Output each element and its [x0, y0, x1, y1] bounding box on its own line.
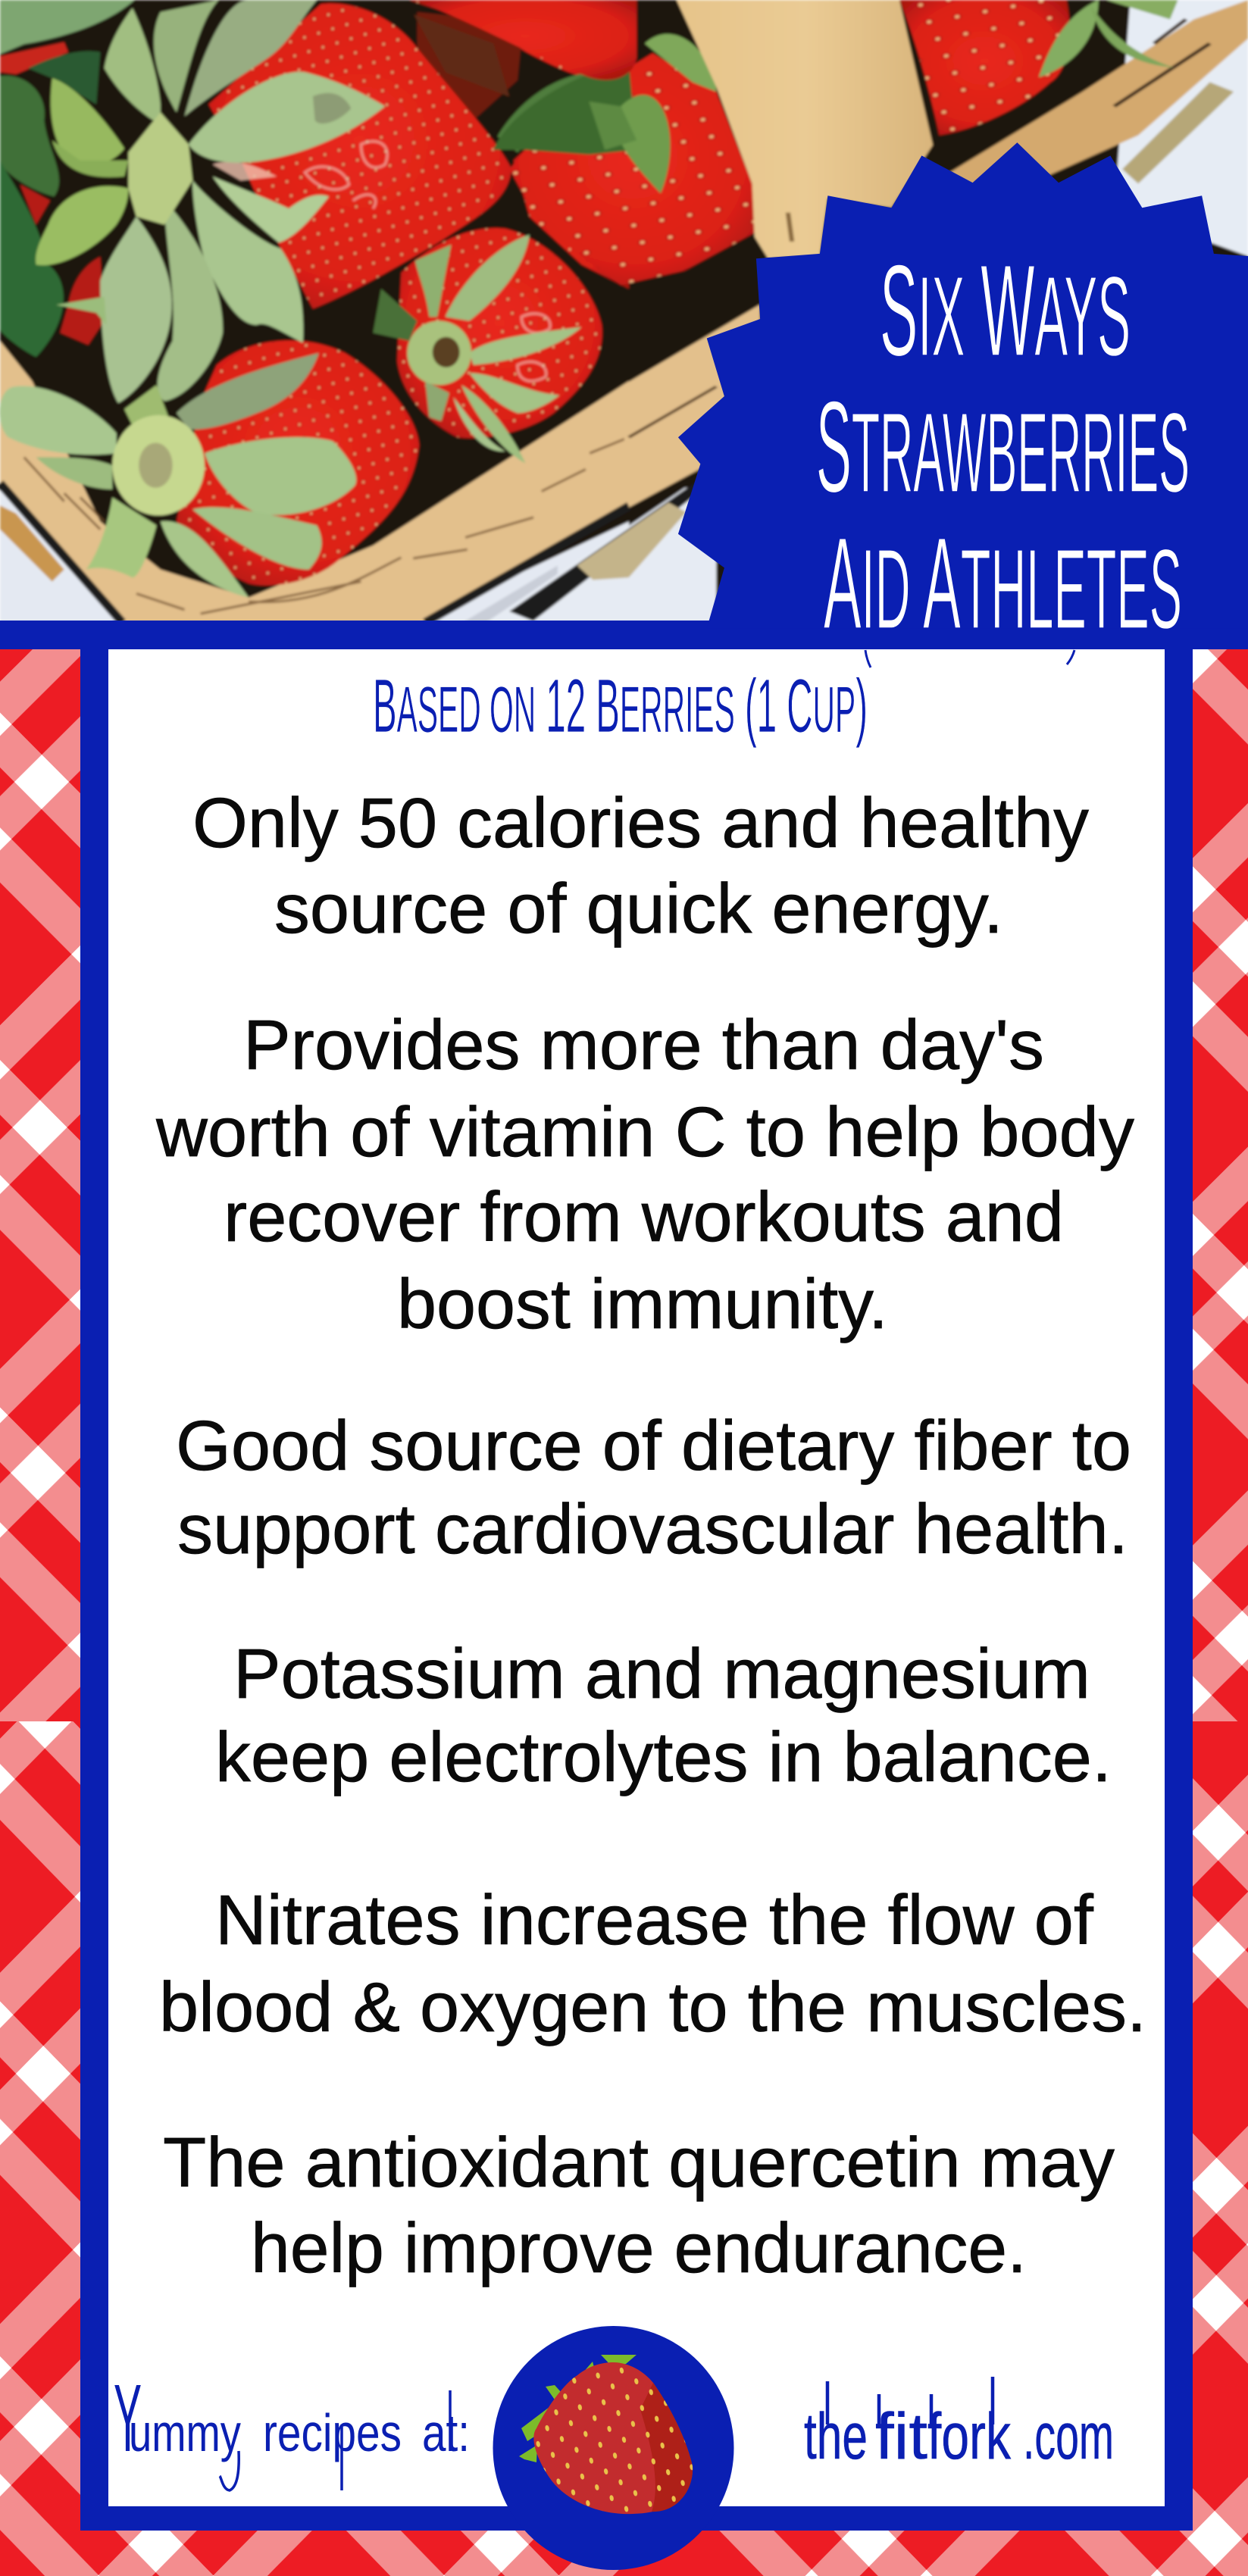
- footer label: Yummy recipes at: ummy: [129, 2403, 241, 2462]
- starburst title badge: [678, 142, 1248, 656]
- left blue frame: [80, 649, 108, 2531]
- footer label: website: the: [804, 2400, 868, 2473]
- basket handle: [677, 0, 933, 258]
- dark green leaves left: [0, 76, 59, 196]
- bottom blue bar: [80, 2506, 1193, 2531]
- clipped parenthesis remnants: [865, 650, 1074, 667]
- icon: strawberry body: [533, 2362, 693, 2514]
- photo left part: [0, 0, 629, 626]
- table surface left: [0, 481, 629, 626]
- gingham background: lower right and bottom: [667, 1721, 1248, 2576]
- top berry: [414, 0, 637, 80]
- lower berry: [177, 340, 419, 586]
- gingham background: left strip upper: [0, 649, 80, 1721]
- big berry: [208, 3, 511, 309]
- top left leaf: [0, 0, 134, 54]
- benefit 6: The antioxidant quercetin may: [163, 2123, 1115, 2202]
- title line: Six Ways: SIX WAYS: [880, 238, 1131, 383]
- benefit 1: source of quick energy.: [274, 869, 1003, 948]
- benefit 5: [159, 1880, 1146, 2046]
- benefit 6: help improve endurance.: [251, 2209, 1027, 2287]
- photo: strawberries in a wooden basket: [0, 0, 1248, 628]
- footer label: Yummy recipes at: recipes: [263, 2403, 402, 2462]
- berry top: [408, 0, 580, 77]
- footer label: Yummy recipes at: at:: [422, 2403, 470, 2462]
- benefit 3: [176, 1406, 1131, 1568]
- top blue bar: [0, 621, 1248, 649]
- peg lower: [577, 502, 686, 580]
- white content panel: [108, 649, 1165, 2506]
- stem leaves: [493, 63, 637, 155]
- footer label: Yummy recipes at: Y: [114, 2365, 142, 2471]
- seed texture: [414, 0, 564, 71]
- gingham background: right strip upper: [1193, 649, 1248, 1721]
- footer label: website: fork: [927, 2400, 1012, 2473]
- middle berry: [509, 53, 756, 285]
- bottom crown leaves: [0, 353, 356, 598]
- wooden rim lower: [621, 305, 760, 508]
- peg upper: [1122, 82, 1234, 183]
- benefit 2: worth of vitamin C to help body: [155, 1093, 1134, 1171]
- footer label: website: fit: [875, 2400, 927, 2473]
- top right green leaves: [497, 72, 629, 152]
- benefit 4: keep electrolytes in balance.: [215, 1718, 1112, 1796]
- icon: strawberry seeds: [533, 2362, 693, 2514]
- icon: strawberry leaves: [519, 2355, 637, 2462]
- red behind crown: [20, 185, 105, 345]
- gingham background: lower left and bottom: [0, 1721, 667, 2576]
- wood grain: [24, 437, 629, 614]
- berry right: [511, 148, 632, 291]
- benefit 2: [155, 1005, 1134, 1343]
- upper wood rim: [939, 0, 1248, 203]
- dark red berry behind: [418, 12, 521, 120]
- table surface right: [1115, 0, 1248, 256]
- right blue frame: [1165, 649, 1193, 2531]
- peg left: [0, 505, 64, 582]
- top right berry: [899, 0, 1070, 136]
- benefit 4: [215, 1634, 1112, 1796]
- top crown leaves: [36, 0, 385, 403]
- benefit 6: [163, 2123, 1115, 2287]
- benefit 3: support cardiovascular health.: [177, 1490, 1128, 1568]
- benefit 2: Provides more than day's: [243, 1005, 1044, 1084]
- middle crown leaves: [373, 235, 582, 463]
- benefit 5: blood & oxygen to the muscles.: [159, 1968, 1146, 2046]
- subheading: BASED ON 12 BERRIES (1 CUP): [373, 664, 868, 749]
- benefit 2: recover from workouts and: [224, 1177, 1064, 1256]
- basket rim left and bottom: [0, 341, 629, 626]
- footer label: Yummy recipes at: [114, 2365, 470, 2490]
- middle berry: [397, 228, 602, 438]
- benefit 5: Nitrates increase the flow of: [215, 1880, 1093, 1959]
- top right leaves: [1039, 0, 1099, 77]
- footer label: website: [804, 2377, 1114, 2473]
- peg right: [571, 526, 629, 580]
- clip bottom: [465, 566, 558, 621]
- benefit 1: Only 50 calories and healthy: [192, 783, 1089, 862]
- benefit 4: Potassium and magnesium: [233, 1634, 1090, 1713]
- footer label: website: .com: [1023, 2400, 1114, 2473]
- benefit 2: boost immunity.: [397, 1265, 888, 1343]
- benefit 1: [192, 783, 1089, 948]
- berry highlights: [305, 142, 550, 381]
- benefit 3: Good source of dietary fiber to: [176, 1406, 1131, 1485]
- circle strawberry badge: [493, 2326, 733, 2570]
- basket shadow edge: [0, 483, 629, 623]
- photo right part: [414, 0, 1248, 628]
- dark green top: [414, 14, 509, 97]
- top small red: [0, 42, 68, 74]
